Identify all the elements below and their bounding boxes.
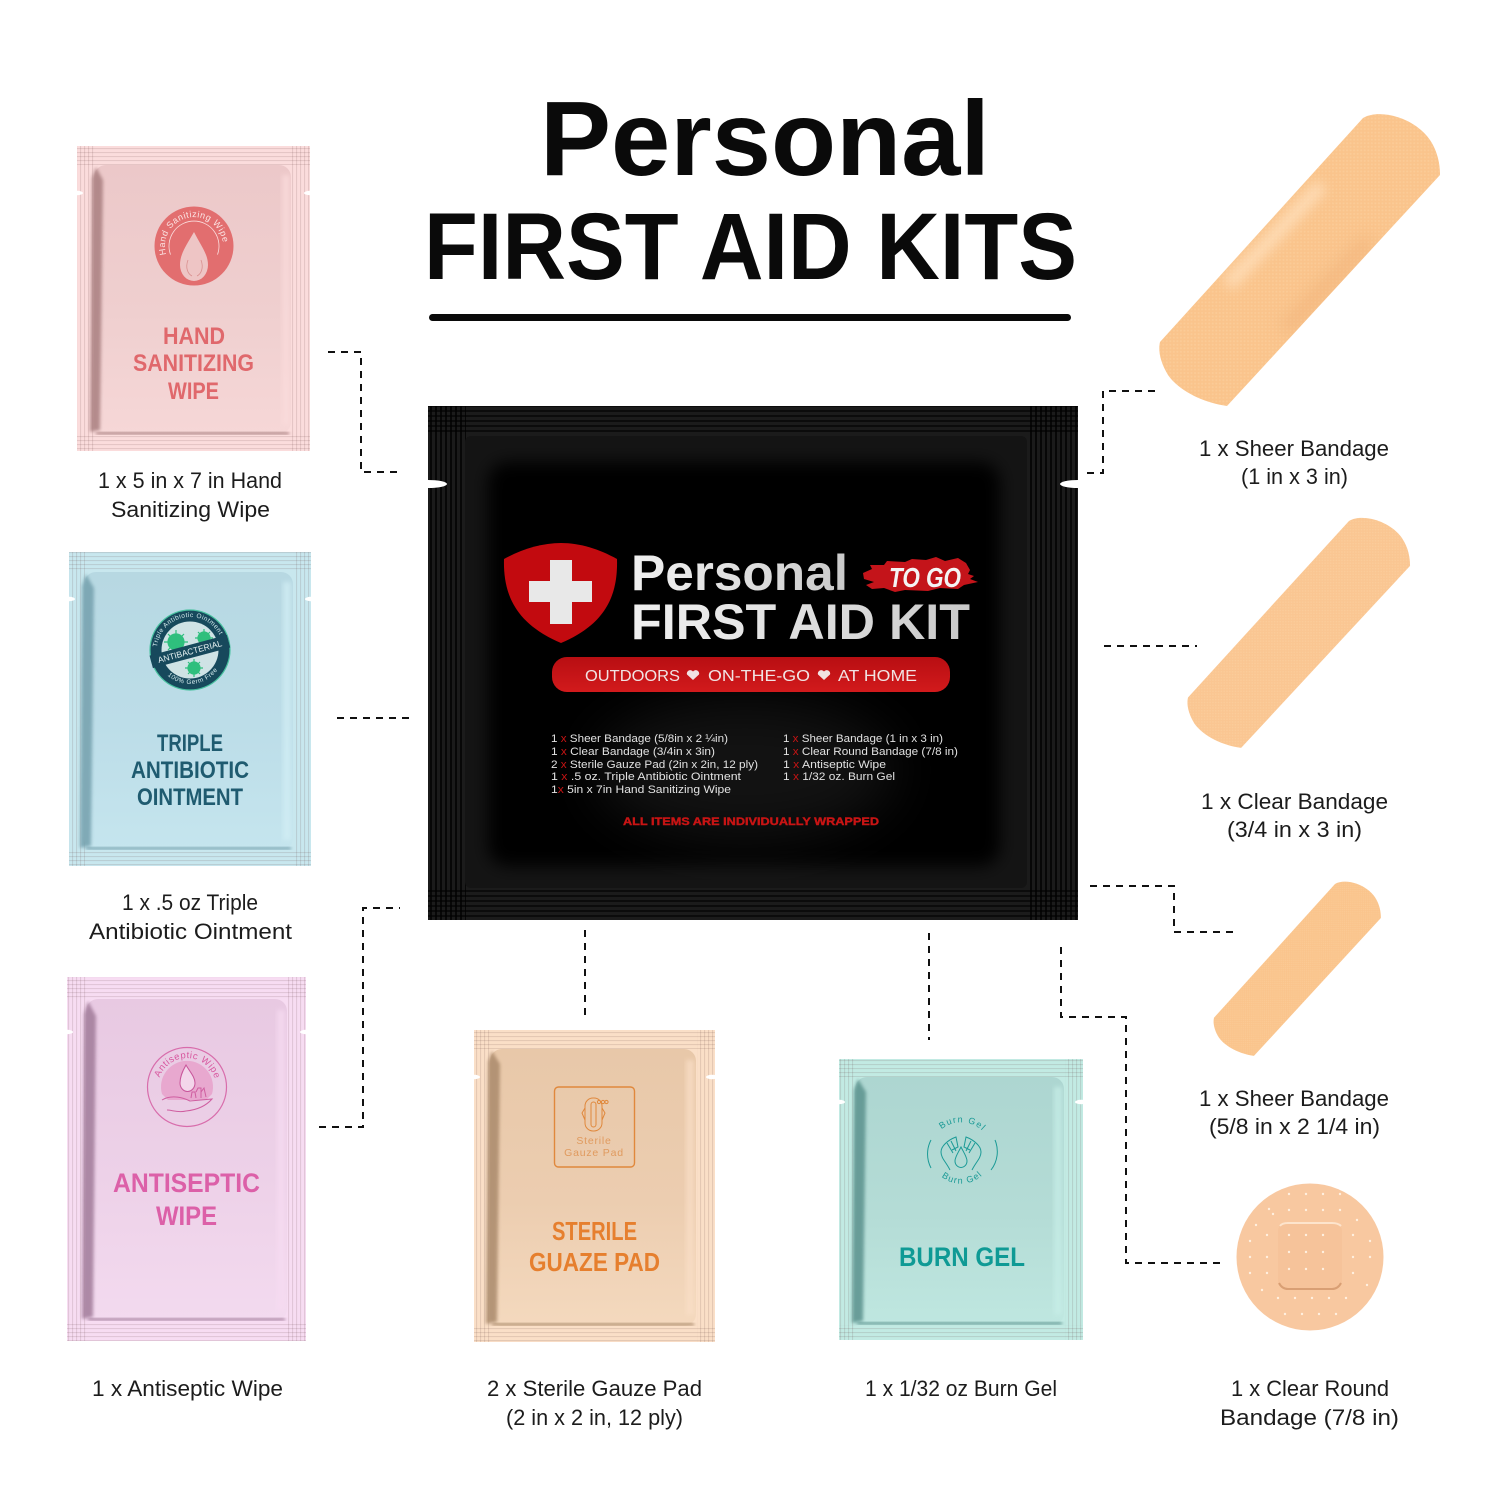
caption: (1 in x 3 in) xyxy=(1241,464,1348,489)
pouch: peach xyxy=(468,1030,718,1342)
pouch label xyxy=(529,1216,660,1277)
pouch label: GUAZE PAD xyxy=(529,1247,660,1277)
pill banner xyxy=(552,657,950,692)
caption: 2 x Sterile Gauze Pad xyxy=(487,1376,702,1401)
pill banner: OUTDOORS xyxy=(585,668,680,685)
caption: (2 in x 2 in, 12 ply) xyxy=(506,1405,683,1430)
caption: 1 x Antiseptic Wipe xyxy=(92,1376,283,1401)
pouch: pink xyxy=(71,146,316,451)
kit wordmark: FIRST AID KIT xyxy=(631,594,970,650)
caption: 1 x Sheer Bandage xyxy=(1199,1086,1389,1111)
icon: hand sanitizing drop badge xyxy=(154,206,234,286)
icon: red shield with white cross xyxy=(504,543,617,643)
icon: antiseptic hand and drop badge xyxy=(146,1046,228,1128)
pill banner: AT HOME xyxy=(838,668,917,685)
caption xyxy=(487,1376,702,1430)
pouch: black xyxy=(409,406,1096,920)
icon: gauze pad badge xyxy=(554,1087,634,1167)
pouch label: ANTISEPTIC xyxy=(113,1168,260,1198)
panel: central black first aid kit pouch xyxy=(409,406,1096,920)
pouch label xyxy=(133,323,254,405)
panel: clear bandage 3/4 in x 3 in xyxy=(1187,518,1410,842)
pouch: mint xyxy=(833,1059,1087,1340)
icon: antibacterial badge: Triple Antibiotic Ointment xyxy=(152,612,223,646)
caption xyxy=(98,468,282,522)
icon: antibacterial badge: 100% Germ Free xyxy=(168,668,217,684)
dashed connector lines xyxy=(319,352,1238,1263)
pouch label: OINTMENT xyxy=(137,784,243,811)
panel: clear round bandage xyxy=(1220,1184,1399,1430)
icon: large sheer bandage xyxy=(1159,114,1440,406)
pouch label xyxy=(113,1168,260,1231)
caption: (3/4 in x 3 in) xyxy=(1227,817,1362,842)
pouch label: WIPE xyxy=(168,378,219,405)
panel: sheer bandage 1 in x 3 in xyxy=(1150,100,1450,489)
pouch label: HAND xyxy=(163,323,225,350)
icon: gauze pad badge: Gauze Pad xyxy=(564,1147,624,1159)
icon: clear bandage xyxy=(1187,518,1410,748)
title: Personal xyxy=(540,80,990,198)
icon: burn gel hands badge xyxy=(927,1118,998,1184)
icon: burn gel hands badge: Burn Gel xyxy=(942,1171,982,1184)
kit wordmark xyxy=(631,545,970,650)
kit wordmark: Personal xyxy=(631,545,848,601)
pouch label xyxy=(131,730,249,811)
caption: 1 x .5 oz Triple xyxy=(122,890,258,915)
icon: antiseptic hand and drop badge: Antiseptic Wipe xyxy=(154,1051,219,1078)
panel: hand sanitizing wipe xyxy=(77,146,310,522)
contents list right column: 1 x 1/32 oz. Burn Gel xyxy=(783,771,895,783)
panel: triple antibiotic ointment xyxy=(69,552,311,944)
caption: Sanitizing Wipe xyxy=(111,497,270,522)
icon: small sheer bandage xyxy=(1214,882,1381,1056)
pouch label: TRIPLE xyxy=(157,730,223,757)
icon: hand sanitizing drop badge: Hand Sanitizing Wipe xyxy=(159,210,228,255)
contents list left column: 1 x Clear Bandage (3/4in x 3in) xyxy=(551,746,715,758)
icon: antibacterial badge xyxy=(149,609,231,691)
contents list left column: 1 x .5 oz. Triple Antibiotic Ointment xyxy=(551,771,741,783)
caption: 1 x 1/32 oz Burn Gel xyxy=(865,1376,1057,1401)
contents list left column: 1x 5in x 7in Hand Sanitizing Wipe xyxy=(551,784,731,796)
pouch label: BURN GEL xyxy=(899,1242,1025,1272)
icon: round bandage xyxy=(1236,1184,1384,1330)
pouch: purple xyxy=(61,977,312,1341)
panel: burn gel xyxy=(839,1059,1083,1401)
pouch label: WIPE xyxy=(156,1201,217,1231)
icon: gauze pad badge: Sterile xyxy=(576,1135,612,1147)
caption: Bandage (7/8 in) xyxy=(1220,1405,1399,1430)
panel: sheer bandage 5/8 in xyxy=(1199,882,1389,1139)
caption: 1 x Clear Bandage xyxy=(1201,789,1388,814)
badge: to go brush stroke: TO GO xyxy=(889,562,961,593)
panel: antiseptic wipe xyxy=(67,977,306,1401)
caption: 1 x 5 in x 7 in Hand xyxy=(98,468,282,493)
contents list left column: 2 x Sterile Gauze Pad (2in x 2in, 12 ply) xyxy=(551,759,758,771)
pouch label: SANITIZING xyxy=(133,350,254,377)
caption xyxy=(1199,436,1389,489)
caption: Antibiotic Ointment xyxy=(89,919,292,944)
badge: to go brush stroke xyxy=(863,557,978,593)
contents list right column: 1 x Antiseptic Wipe xyxy=(783,759,886,771)
pouch label: STERILE xyxy=(552,1216,637,1246)
title xyxy=(424,80,1077,321)
caption: 1 x Clear Round xyxy=(1231,1376,1389,1401)
caption: (5/8 in x 2 1/4 in) xyxy=(1209,1114,1380,1139)
caption xyxy=(1201,789,1388,842)
caption: 1 x Sheer Bandage xyxy=(1199,436,1389,461)
contents list right column: 1 x Sheer Bandage (1 in x 3 in) xyxy=(783,733,943,745)
pouch: blue xyxy=(63,552,317,866)
title: FIRST AID KITS xyxy=(424,194,1077,300)
pouch label: ANTIBIOTIC xyxy=(131,757,249,784)
contents list right column: 1 x Clear Round Bandage (7/8 in) xyxy=(783,746,958,758)
caption xyxy=(1220,1376,1399,1430)
icon: antibacterial badge: ANTIBACTERIAL xyxy=(157,638,223,665)
caption xyxy=(1199,1086,1389,1139)
wrapped notice: ALL ITEMS ARE INDIVIDUALLY WRAPPED xyxy=(623,816,879,828)
pill banner: ON-THE-GO xyxy=(708,668,810,685)
contents list left column: 1 x Sheer Bandage (5/8in x 2 ¼in) xyxy=(551,733,728,745)
contents list left column xyxy=(551,733,758,796)
caption xyxy=(89,890,292,944)
panel: sterile gauze pad xyxy=(468,1030,718,1430)
contents list right column xyxy=(783,733,958,783)
icon: burn gel hands badge: Burn Gel xyxy=(938,1118,986,1130)
